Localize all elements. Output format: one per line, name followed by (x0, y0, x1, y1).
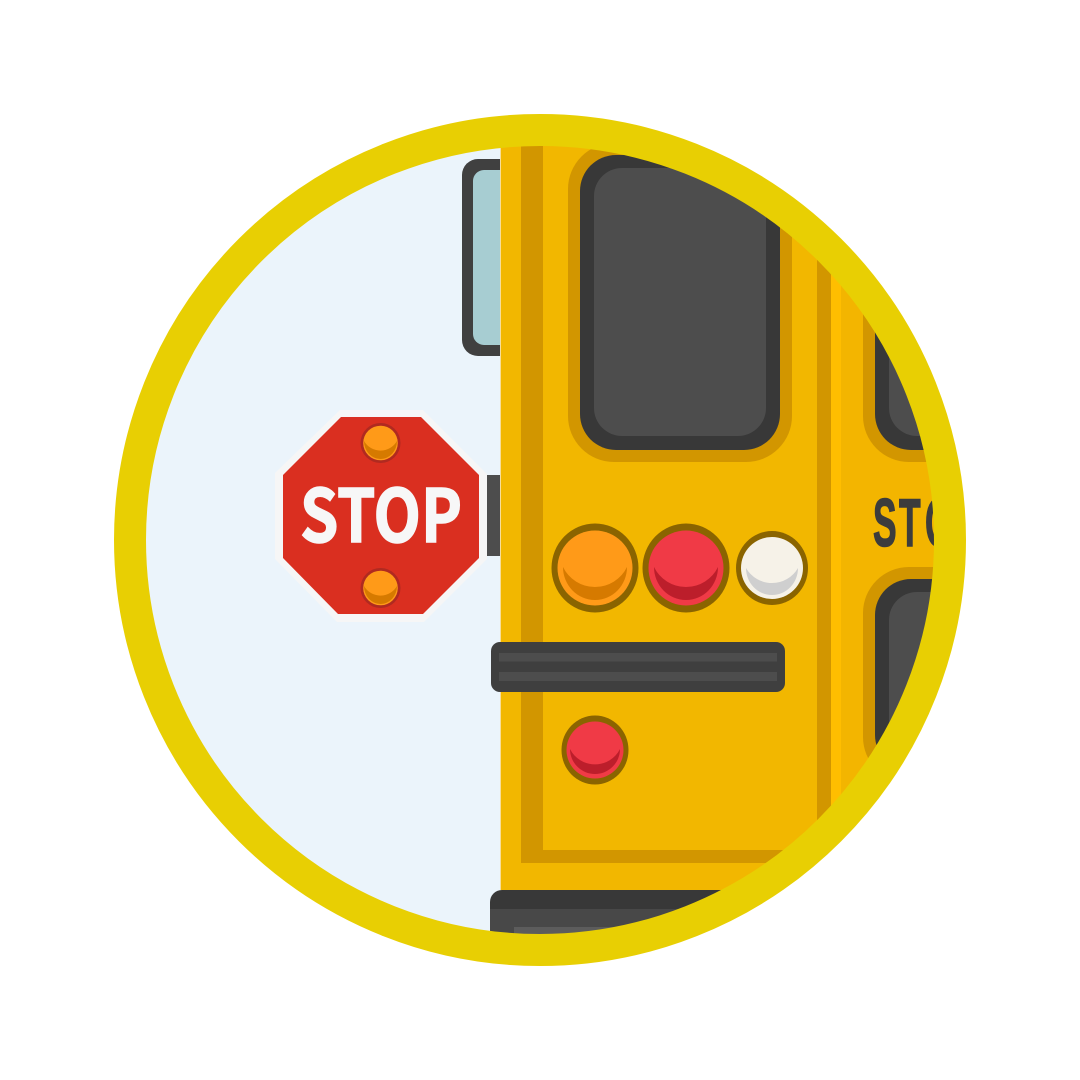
bus body (500, 146, 934, 890)
stop sign (275, 410, 487, 622)
stop sign bottom light (360, 568, 400, 608)
door window (568, 143, 792, 462)
badge ring (130, 130, 950, 950)
rear bumper (490, 890, 721, 934)
stop sign arm (487, 475, 500, 556)
light panel strip (831, 274, 841, 806)
bus stop lettering: STOP (873, 486, 975, 561)
orange light (552, 524, 638, 612)
badge background (145, 145, 935, 935)
red light (642, 524, 730, 612)
stop sign text: STOP (300, 458, 462, 564)
body trim stripe (521, 100, 831, 863)
illustration: school bus with stop sign in circular badge (114, 114, 966, 966)
stop sign top light (360, 423, 400, 463)
side window lower (863, 567, 933, 758)
clipped scene (275, 146, 934, 934)
lower red light (562, 716, 628, 784)
white light (736, 531, 808, 605)
bus rear side window (462, 159, 500, 356)
side window upper (863, 314, 926, 462)
rub rail handle (491, 642, 785, 692)
